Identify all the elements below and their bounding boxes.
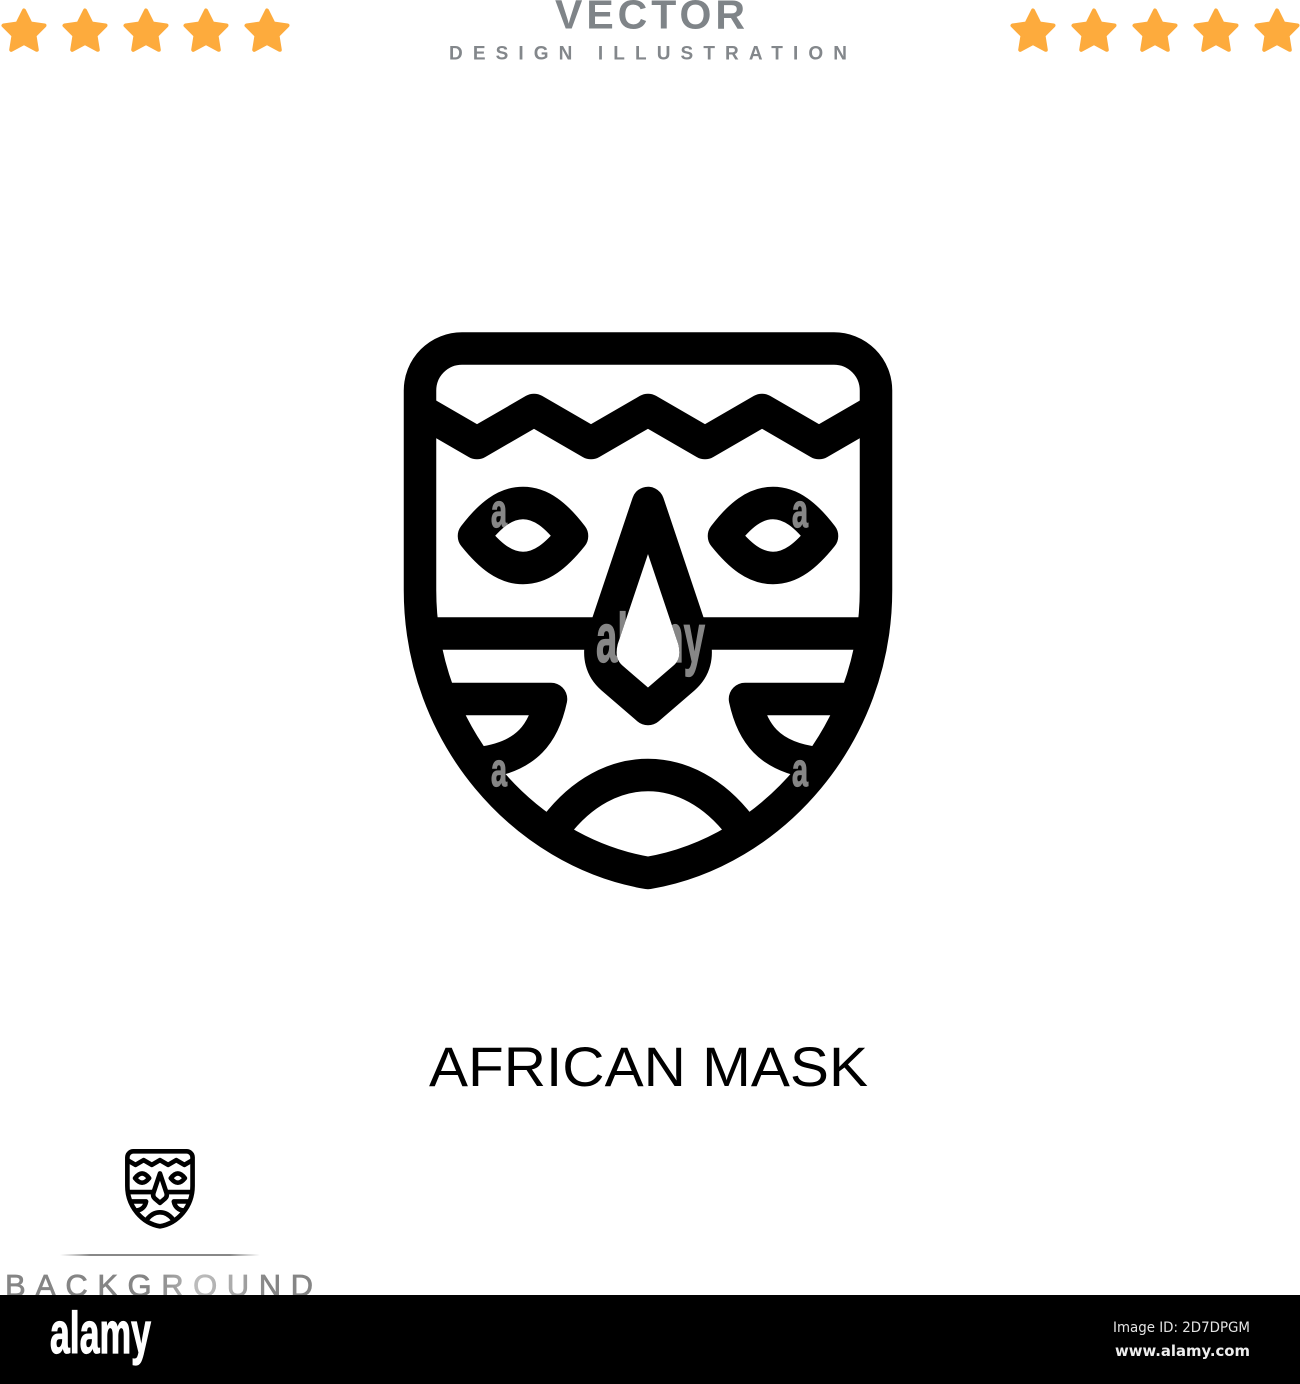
subheading: design illustration: DESIGN ILLUSTRATION <box>449 44 847 64</box>
watermark over mask: a <box>491 484 508 537</box>
watermark over mask: alamy <box>596 599 705 677</box>
stars: left rating row <box>4 10 288 50</box>
footer band <box>0 1295 1300 1384</box>
watermark over mask: a <box>792 743 809 796</box>
watermark over mask <box>491 484 809 796</box>
title: African Mask: AFRICAN MASK <box>429 1035 868 1098</box>
logo divider line <box>60 1254 260 1256</box>
website: www.alamy.com <box>1115 1342 1250 1360</box>
image id: Image ID: 2D7DPGM <box>1113 1320 1250 1336</box>
icon: large african mask <box>420 348 876 873</box>
stars: right rating row <box>1012 10 1298 50</box>
watermark over mask: a <box>792 484 809 537</box>
footer logo: alamy: alamy <box>50 1301 151 1366</box>
watermark over mask: a <box>491 743 508 796</box>
icon: small african mask logo <box>127 1151 193 1226</box>
logo text: BACKGROUND: BACKGROUND <box>5 1268 313 1303</box>
